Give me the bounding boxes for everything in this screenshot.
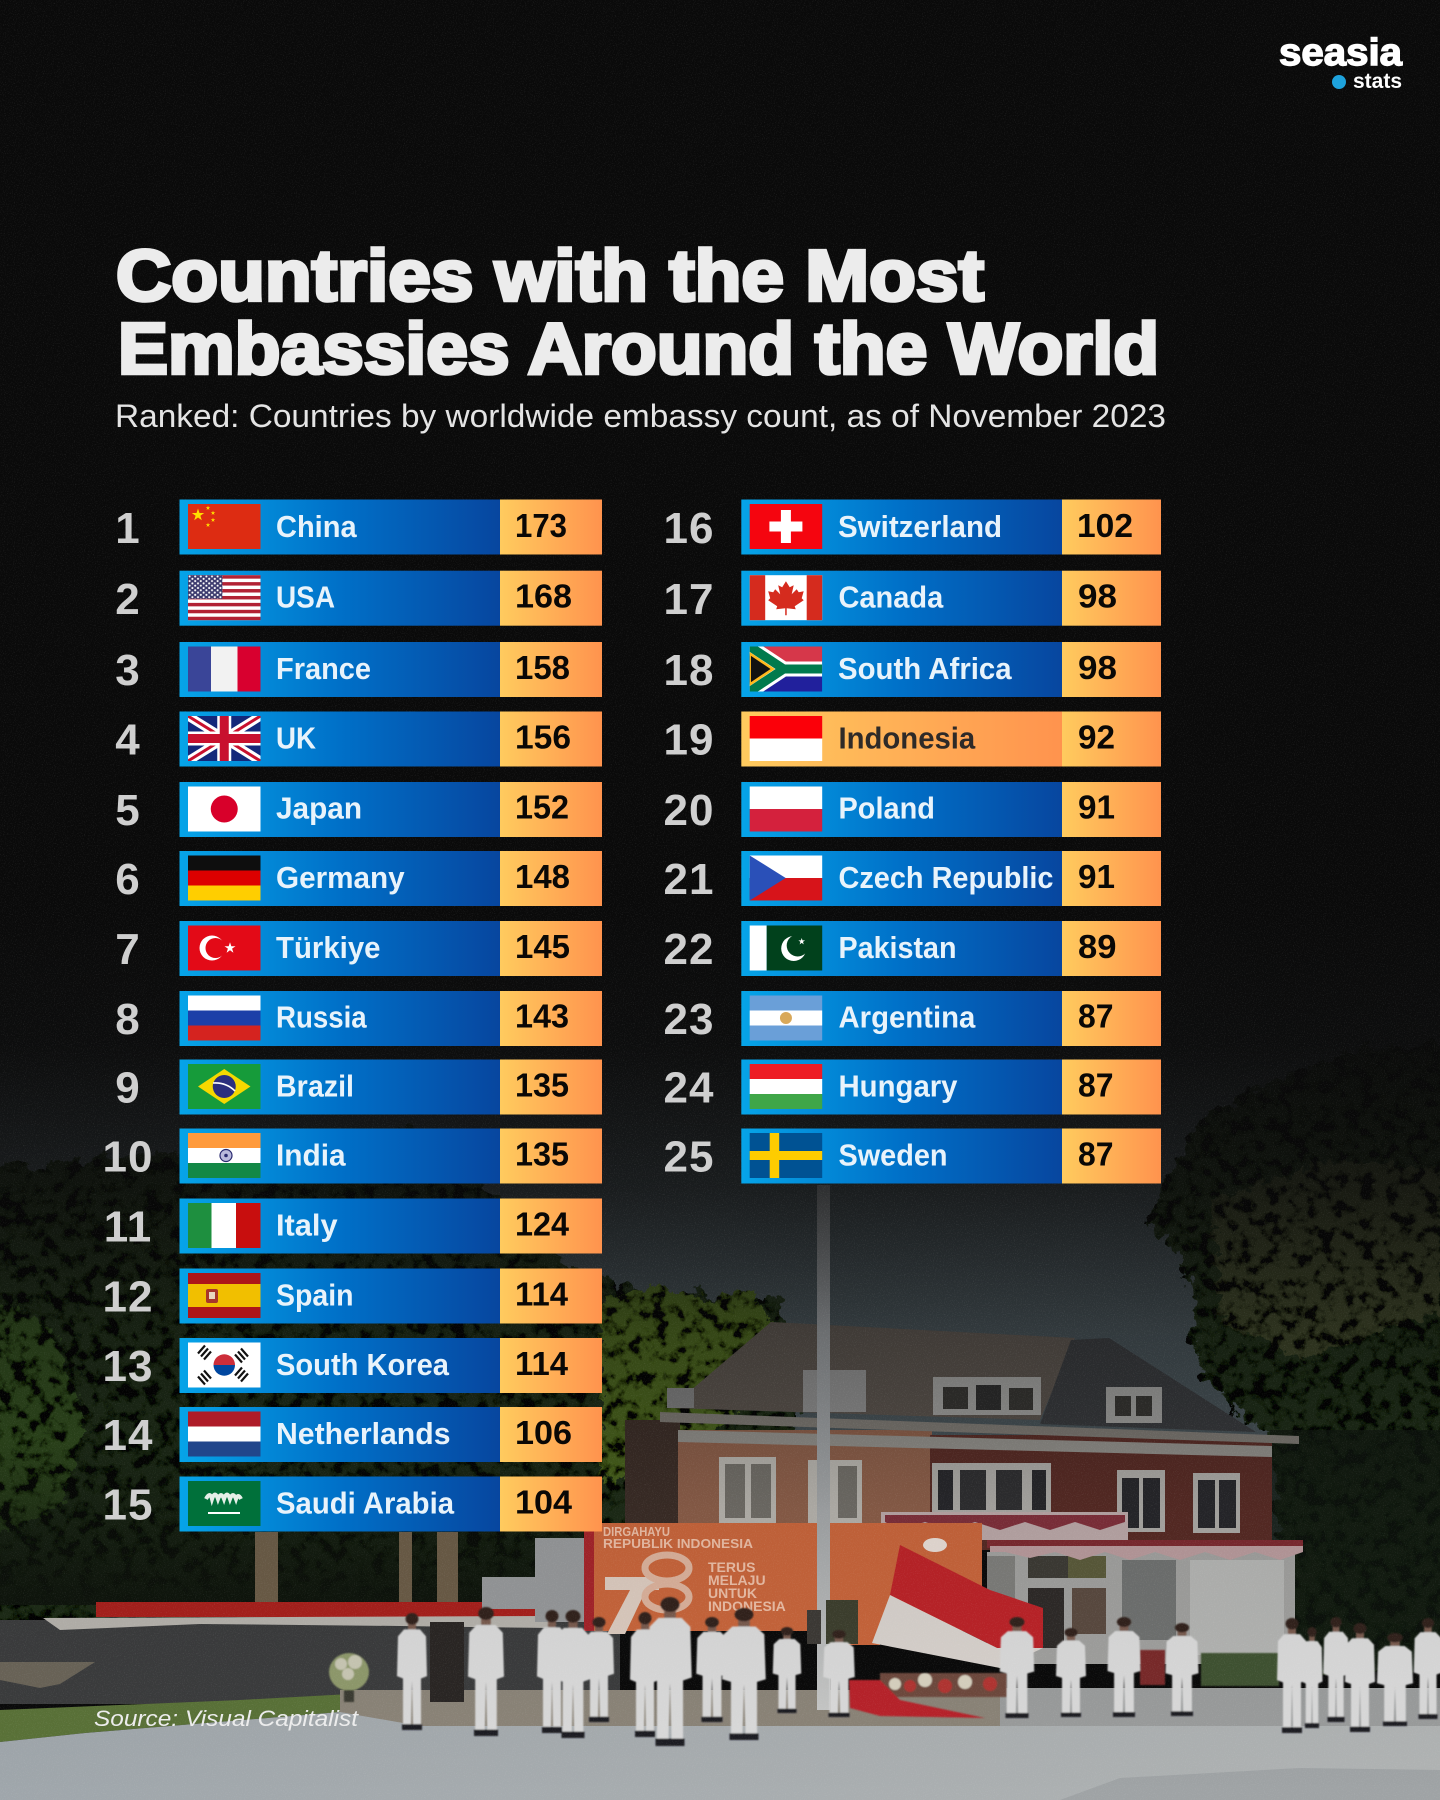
row 2 USA: USA (276, 580, 335, 614)
photo: dormers (667, 1370, 1162, 1423)
row 1 China: China (276, 510, 358, 544)
row 6 Germany (115, 851, 602, 906)
row 5 Japan: 152 (515, 788, 569, 826)
row 5 Japan: Japan (276, 792, 362, 826)
row 6 Germany: 148 (515, 858, 570, 895)
row 18 South Africa: 98 (1078, 649, 1117, 686)
row 7 Türkiye: 145 (515, 928, 570, 965)
title: Embassies Around the World (118, 310, 1159, 390)
row 16 Switzerland: 102 (1077, 507, 1133, 544)
photo: indonesian flag being raised (872, 1545, 1043, 1668)
logo: seasia stats: stats (1353, 70, 1402, 93)
row 14 Netherlands: 14 (103, 1411, 153, 1460)
row 25 Sweden (664, 1128, 1161, 1184)
row 22 Pakistan: 89 (1078, 928, 1116, 965)
subtitle: Ranked: Countries by worldwide embassy count, as of November 2023 (115, 398, 1166, 434)
row 10 India: 10 (103, 1132, 153, 1182)
row 21 Czech Republic: 21 (664, 855, 714, 904)
row 18 South Africa: 18 (664, 646, 714, 695)
row 16 Switzerland: 16 (664, 504, 714, 553)
row 14 Netherlands (103, 1407, 602, 1462)
row 12 Spain: 114 (515, 1276, 569, 1312)
row 8 Russia (115, 991, 602, 1046)
row 6 Germany: Germany (276, 861, 405, 895)
row 20 Poland: 20 (664, 786, 714, 835)
row 24 Hungary: 87 (1078, 1066, 1114, 1104)
row 20 Poland: Poland (838, 792, 935, 826)
photo: orange banner: INDONESIA (708, 1598, 786, 1614)
photo: upper windows (719, 1457, 1240, 1533)
photo: road (0, 1620, 620, 1704)
photo: dark-suited guests and officer (430, 1600, 858, 1702)
row 25 Sweden: 25 (664, 1132, 714, 1182)
row 8 Russia: 143 (515, 998, 569, 1034)
photo: lit leaves on right tree (1210, 1160, 1440, 1360)
row 1 China (115, 500, 602, 554)
row 8 Russia: 8 (115, 995, 141, 1044)
row 21 Czech Republic (664, 851, 1161, 906)
photo: left forest (0, 1130, 800, 1640)
row 23 Argentina: 23 (664, 995, 714, 1044)
row 2 USA: 168 (515, 578, 572, 614)
row 8 Russia: Russia (276, 1000, 368, 1034)
row 1 China: 173 (515, 507, 567, 544)
row 19 Indonesia: 19 (664, 716, 714, 764)
ranking column: 16 to 25 (664, 500, 1161, 1184)
row 18 South Africa (664, 642, 1161, 697)
row 11 Italy (104, 1198, 602, 1254)
row 19 Indonesia (664, 712, 1161, 766)
row 4 UK: 4 (115, 716, 141, 764)
row 9 Brazil: 9 (115, 1064, 141, 1112)
photo: tree behind the house (600, 1285, 780, 1480)
row 15 Saudi Arabia (103, 1476, 602, 1532)
row 6 Germany: 6 (115, 855, 141, 904)
photo: long red and white banner (43, 1602, 552, 1630)
row 9 Brazil (115, 1060, 602, 1114)
row 12 Spain (103, 1268, 602, 1324)
row 7 Türkiye: 7 (115, 925, 141, 974)
row 5 Japan (115, 782, 602, 837)
photo: dark forest behind the long banner (0, 1440, 590, 1605)
row 18 South Africa: South Africa (838, 652, 1013, 686)
row 11 Italy: 11 (104, 1202, 152, 1252)
photo: flagpole (817, 1185, 830, 1710)
photo: grass (0, 1694, 350, 1742)
photo: orange banner: UNTUK (708, 1585, 757, 1601)
row 13 South Korea (103, 1338, 602, 1393)
row 25 Sweden: Sweden (838, 1138, 948, 1172)
row 11 Italy: Italy (276, 1208, 338, 1242)
row 13 South Korea: 114 (515, 1345, 569, 1382)
photo: porch (987, 1552, 1295, 1664)
photo: orange banner (584, 1523, 982, 1645)
photo: sky (0, 900, 1440, 1540)
photo: right tree (1146, 1040, 1440, 1670)
photo: plaza ground (0, 1712, 1440, 1800)
row 22 Pakistan: 22 (664, 925, 714, 974)
row 22 Pakistan: Pakistan (838, 931, 956, 965)
row 15 Saudi Arabia: 104 (515, 1484, 573, 1520)
row 20 Poland: 91 (1078, 788, 1115, 826)
row 16 Switzerland: Switzerland (838, 510, 1002, 544)
photo: white side building (482, 1538, 587, 1622)
photo: paving (340, 1690, 1440, 1732)
photo: sun patch on road (0, 1662, 95, 1688)
row 13 South Korea: South Korea (276, 1348, 450, 1382)
row 15 Saudi Arabia: 15 (103, 1480, 153, 1530)
row 24 Hungary (664, 1060, 1161, 1114)
photo: deep shade in right tree (1270, 1430, 1440, 1670)
row 23 Argentina: 87 (1078, 998, 1114, 1034)
row 10 India (103, 1128, 602, 1184)
row 10 India: India (276, 1138, 347, 1172)
row 23 Argentina (664, 991, 1161, 1046)
row 20 Poland (664, 782, 1161, 837)
title (116, 236, 1159, 390)
photo: orange banner: TERUS (708, 1559, 755, 1575)
row 4 UK: 156 (515, 718, 571, 756)
row 21 Czech Republic: 91 (1078, 858, 1115, 895)
source credit: Source: Visual Capitalist (94, 1706, 359, 1731)
row 7 Türkiye: Türkiye (276, 931, 380, 965)
photo: house walls (625, 1420, 1272, 1550)
photo: balcony with bunting (881, 1512, 1128, 1540)
row 4 UK (115, 712, 602, 766)
row 15 Saudi Arabia: Saudi Arabia (276, 1486, 455, 1520)
photo: porch awning bunting (987, 1540, 1303, 1560)
row 13 South Korea: 13 (103, 1342, 153, 1391)
photo: tree trunks (255, 1532, 458, 1602)
row 3 France: 158 (515, 649, 570, 686)
photo: ceremony guards in white (397, 1597, 1440, 1746)
row 17 Canada: 17 (664, 575, 714, 624)
row 4 UK: UK (276, 722, 316, 756)
row 2 USA (115, 571, 602, 626)
photo: orange banner: MELAJU (708, 1572, 766, 1588)
row 24 Hungary: Hungary (838, 1070, 958, 1104)
photo: right paving (1000, 1688, 1440, 1728)
row 21 Czech Republic: Czech Republic (838, 861, 1054, 895)
photo: bright foliage at far left (0, 1290, 85, 1540)
row 22 Pakistan (664, 921, 1161, 976)
row 24 Hungary: 24 (664, 1064, 714, 1112)
photo: flower beds and carpet (329, 1650, 1279, 1718)
row 3 France: 3 (115, 646, 141, 695)
row 12 Spain: Spain (276, 1278, 354, 1312)
photo: roof (660, 1322, 1299, 1457)
row 17 Canada: Canada (838, 580, 944, 614)
ranking column: 1 to 15 (103, 500, 602, 1532)
row 17 Canada: 98 (1078, 578, 1117, 614)
row 19 Indonesia: 92 (1078, 718, 1115, 756)
logo: seasia stats: seasia (1279, 32, 1403, 74)
logo: seasia stats (1279, 32, 1403, 93)
row 12 Spain: 12 (103, 1272, 153, 1322)
row 3 France: France (276, 652, 371, 686)
row 3 France (115, 642, 602, 697)
row 7 Türkiye (115, 921, 602, 976)
photo: orange banner: REPUBLIK INDONESIA (603, 1536, 754, 1551)
row 14 Netherlands: 106 (515, 1414, 572, 1451)
row 1 China: 1 (115, 504, 141, 553)
title: Countries with the Most (116, 236, 984, 316)
row 9 Brazil: 135 (515, 1066, 569, 1104)
row 23 Argentina: Argentina (838, 1000, 976, 1034)
row 25 Sweden: 87 (1078, 1136, 1114, 1172)
photo: orange banner: DIRGAHAYU (603, 1524, 670, 1539)
row 10 India: 135 (515, 1136, 569, 1172)
row 17 Canada (664, 571, 1161, 626)
row 19 Indonesia: Indonesia (838, 722, 976, 756)
row 5 Japan: 5 (115, 786, 141, 835)
row 11 Italy: 124 (515, 1206, 570, 1242)
row 2 USA: 2 (115, 575, 141, 624)
row 14 Netherlands: Netherlands (276, 1417, 450, 1451)
row 16 Switzerland (664, 500, 1161, 554)
photo: plaza shadows (1060, 1768, 1440, 1800)
row 9 Brazil: Brazil (276, 1070, 354, 1104)
